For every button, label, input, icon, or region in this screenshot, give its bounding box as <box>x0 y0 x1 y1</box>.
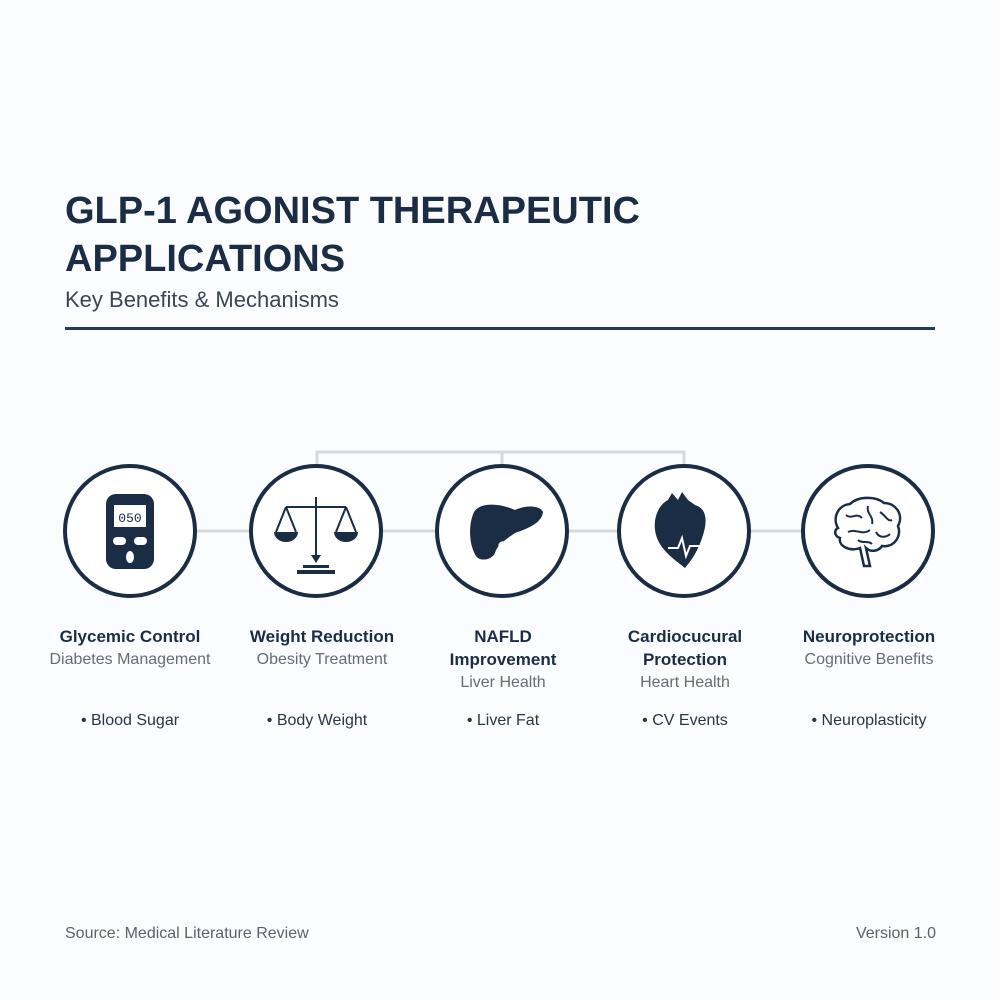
column: neuroprotection: Neuroprotection <box>803 627 935 646</box>
column: NAFLD <box>450 627 556 691</box>
title: APPLICATIONS <box>65 238 345 280</box>
column: cardiovascular: Heart Health <box>640 674 730 691</box>
icon: glucose meter: 050 <box>118 511 142 526</box>
column: neuroprotection: Cognitive Benefits <box>805 651 933 668</box>
column: cardiovascular: Protection <box>643 650 727 669</box>
header divider <box>65 327 935 330</box>
icon: brain <box>803 466 933 596</box>
title <box>65 190 640 280</box>
subtitle: Key Benefits & Mechanisms <box>65 287 339 312</box>
footer source: Source: Medical Literature Review <box>65 925 309 942</box>
icon: scales <box>251 466 381 596</box>
bullet: blood sugar: • Blood Sugar <box>81 712 179 729</box>
icon: liver <box>437 466 567 596</box>
column: NAFLD: Liver Health <box>460 674 546 691</box>
column: glycemic control <box>50 627 210 668</box>
bullet: neuroplasticity: • Neuroplasticity <box>812 712 926 729</box>
column: weight reduction <box>250 627 394 668</box>
column: glycemic control: Glycemic Control <box>60 627 200 646</box>
column: glycemic control: Diabetes Management <box>50 651 210 668</box>
icon: heart <box>619 466 749 596</box>
column: weight reduction: Obesity Treatment <box>257 651 387 668</box>
column: NAFLD: NAFLD <box>474 627 532 646</box>
bullet: body weight: • Body Weight <box>267 712 367 729</box>
column: neuroprotection <box>803 627 935 668</box>
bullet: CV events: • CV Events <box>642 712 728 729</box>
column: weight reduction: Weight Reduction <box>250 627 394 646</box>
column: NAFLD: Improvement <box>450 650 556 669</box>
title: GLP-1 AGONIST THERAPEUTIC <box>65 190 640 232</box>
column: cardiovascular <box>628 627 742 691</box>
bullet: liver fat: • Liver Fat <box>467 712 539 729</box>
footer version: Version 1.0 <box>856 925 936 942</box>
icon: glucose meter <box>65 466 195 596</box>
column: cardiovascular: Cardiocucural <box>628 627 742 646</box>
